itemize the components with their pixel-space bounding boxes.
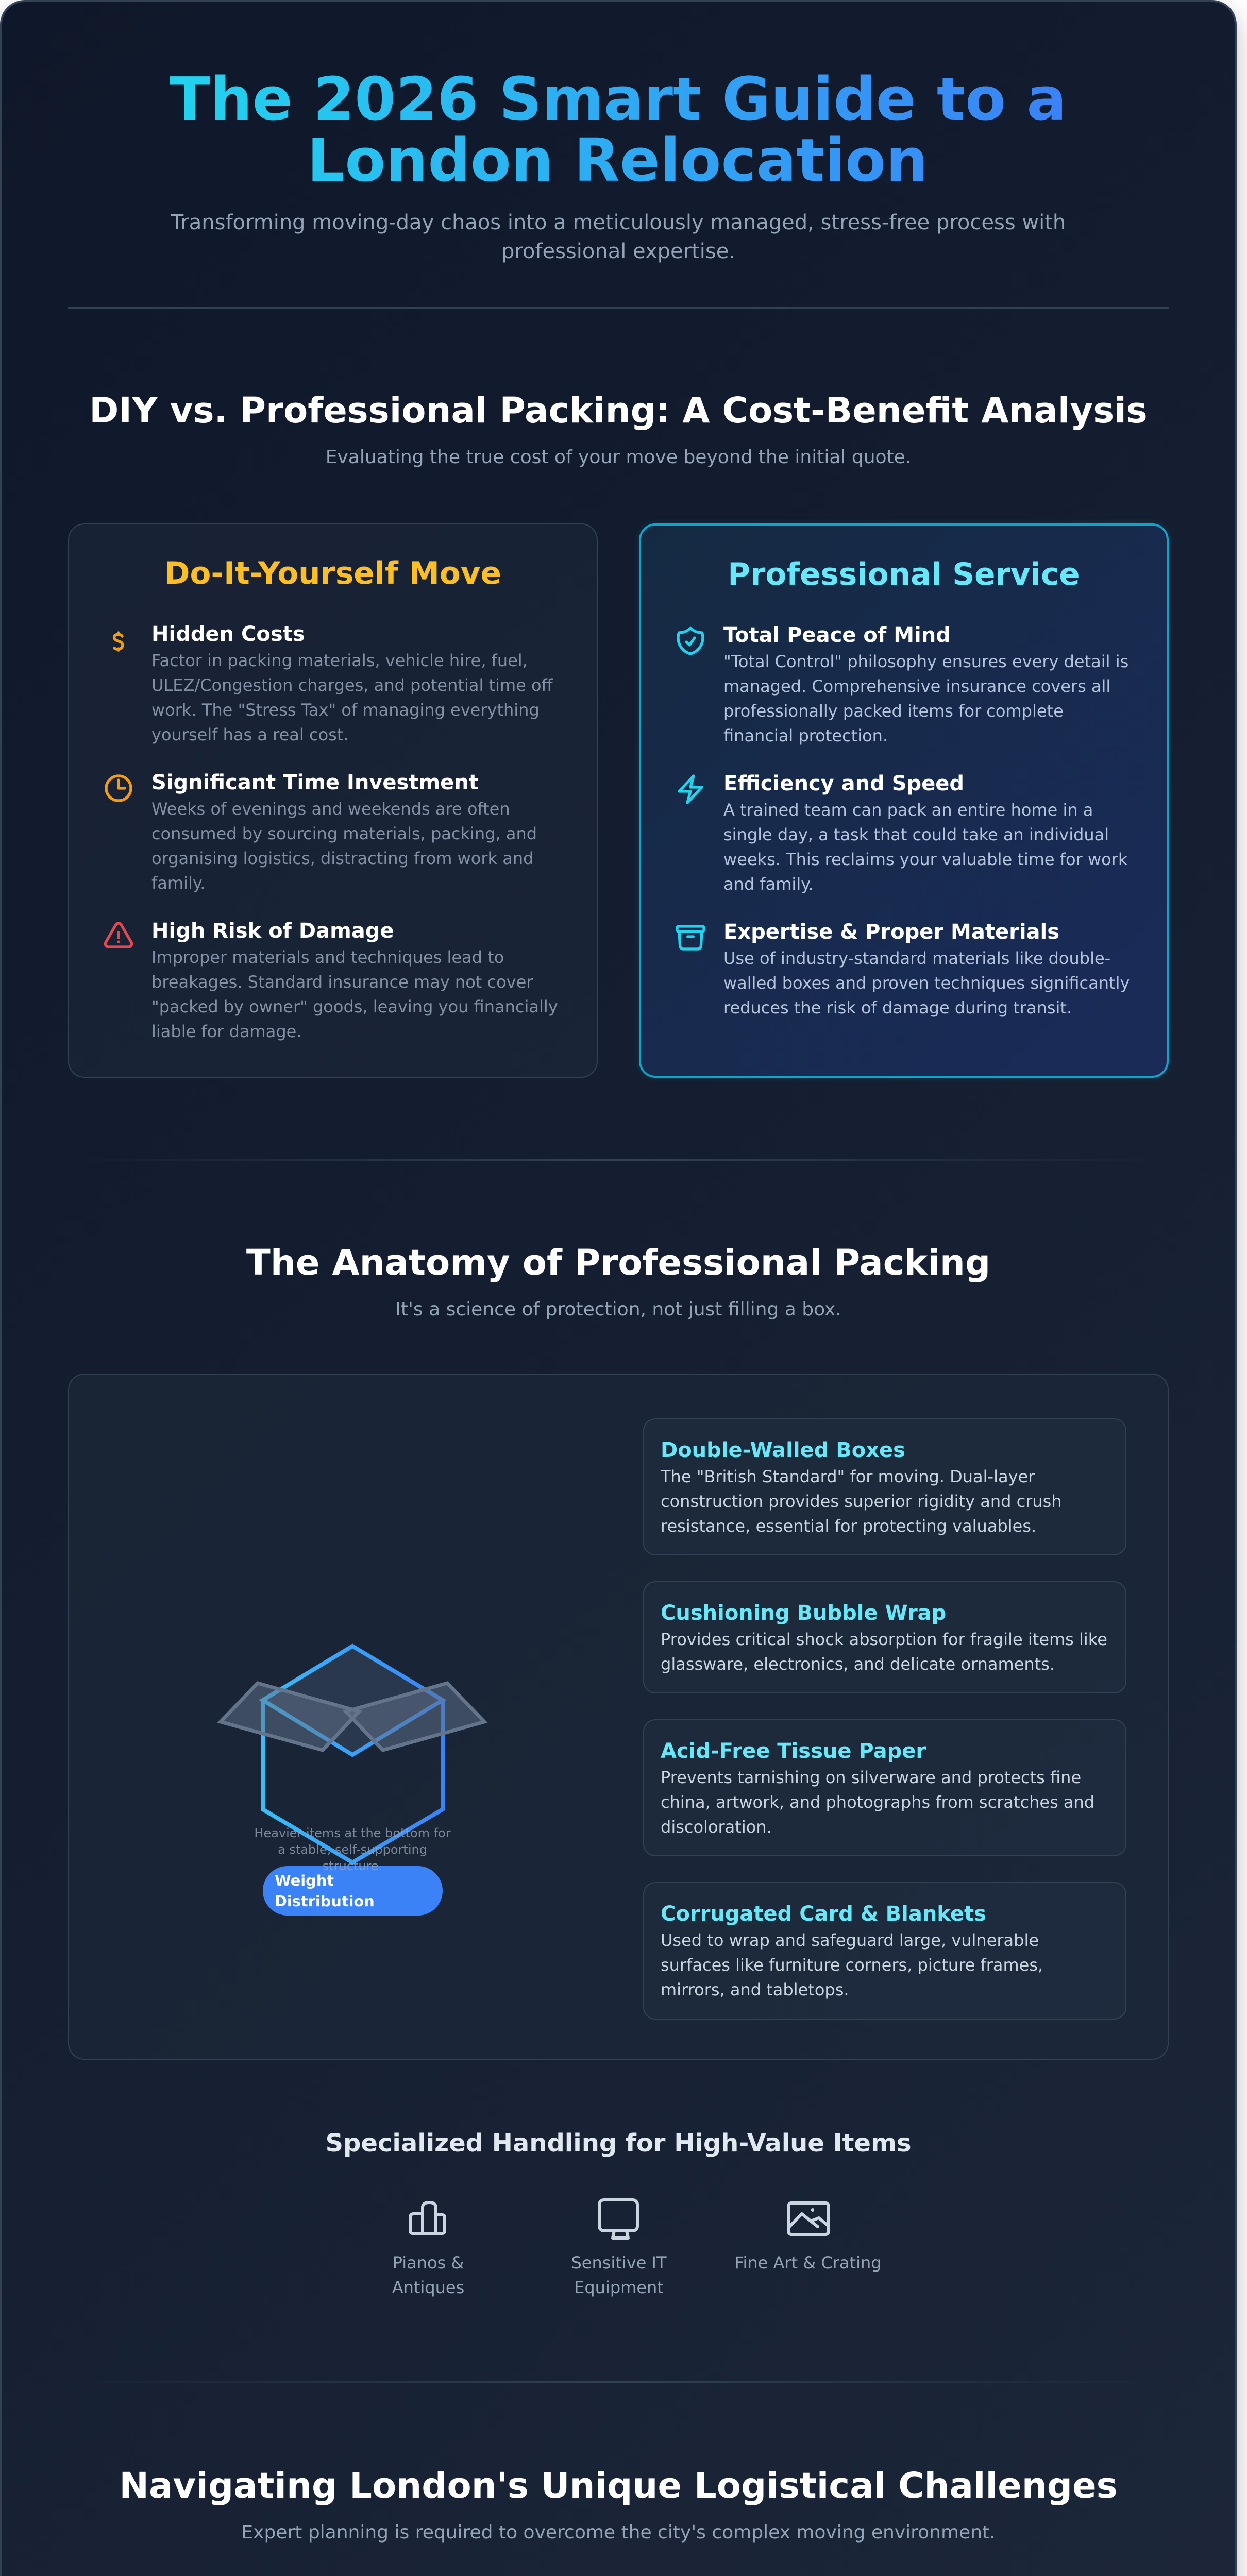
label: pianos <box>325 2250 531 2300</box>
title: The 2026 Smart Guide to a <box>170 65 1067 134</box>
box caption: Heavier items at the bottom for <box>254 1826 451 1840</box>
item text: professionally packed items for complete <box>723 701 1064 721</box>
item text <box>723 946 1130 1020</box>
icon: archive box <box>674 921 707 954</box>
label: sensitive IT: Sensitive IT <box>571 2253 667 2273</box>
section heading: DIY vs. Professional Packing: A Cost-Benefit Analysis <box>89 390 1148 431</box>
item text: organising logistics, distracting from work and <box>151 849 533 868</box>
card text: surfaces like furniture corners, picture frames, <box>661 1955 1043 1975</box>
item: time investment <box>102 772 566 895</box>
panel title: Professional Service <box>728 557 1080 592</box>
item text: and family. <box>723 874 814 894</box>
item text <box>151 648 553 747</box>
panel: anatomy <box>68 1374 1169 2060</box>
card text: mirrors, and tabletops. <box>661 1980 849 1999</box>
box diagram <box>206 1623 515 1932</box>
pill label: Weight <box>275 1872 334 1889</box>
item heading: Expertise & Proper Materials <box>723 920 1059 944</box>
item text: Improper materials and techniques lead to <box>151 947 504 967</box>
item text: managed. Comprehensive insurance covers all <box>723 676 1110 696</box>
card: bubble wrap <box>643 1581 1126 1693</box>
icon: clock <box>102 772 135 805</box>
item text: breakages. Standard insurance may not cover <box>151 972 533 992</box>
item heading: Total Peace of Mind <box>723 623 951 647</box>
item text: Factor in packing materials, vehicle hire, fuel, <box>151 651 528 670</box>
card text <box>661 1765 1094 1839</box>
card text <box>661 1627 1107 1676</box>
box caption <box>249 1825 456 1874</box>
section heading: The Anatomy of Professional Packing <box>246 1242 990 1283</box>
card text: The "British Standard" for moving. Dual-layer <box>661 1467 1035 1486</box>
panel title: Do-It-Yourself Move <box>164 556 501 591</box>
item text: "Total Control" philosophy ensures every detail is <box>723 652 1128 671</box>
subtitle <box>171 211 1066 263</box>
label: sensitive IT <box>516 2250 722 2300</box>
subtitle: professional expertise. <box>501 240 735 263</box>
icon: monitor <box>593 2195 644 2241</box>
card heading: Acid-Free Tissue Paper <box>661 1739 926 1763</box>
card text: Provides critical shock absorption for fragile items like <box>661 1630 1107 1649</box>
label: pianos: Antiques <box>392 2278 464 2297</box>
item text: liable for damage. <box>151 1022 302 1041</box>
box caption: a stable, self-supporting <box>278 1842 427 1857</box>
section subheading: Expert planning is required to overcome the city's complex moving environment. <box>241 2522 996 2543</box>
card heading: Double-Walled Boxes <box>661 1438 905 1462</box>
card text: construction provides superior rigidity and crush <box>661 1492 1062 1511</box>
item text: financial protection. <box>723 726 888 745</box>
item text: walled boxes and proven techniques significantly <box>723 973 1130 993</box>
label: fine art: Fine Art & Crating <box>734 2253 882 2273</box>
label: pianos: Pianos & <box>393 2253 464 2273</box>
icon: piano <box>402 2195 453 2236</box>
pill label <box>275 1870 375 1911</box>
card: corrugated card <box>643 1882 1126 2020</box>
card text: glassware, electronics, and delicate ornaments. <box>661 1654 1055 1674</box>
item text: Use of industry-standard materials like double- <box>723 948 1110 968</box>
item heading: Efficiency and Speed <box>723 772 964 795</box>
item text: A trained team can pack an entire home in a <box>723 800 1093 820</box>
header <box>68 65 1169 309</box>
item text: "packed by owner" goods, leaving you financially <box>151 997 558 1016</box>
card text: china, artwork, and photographs from scratches and <box>661 1792 1094 1812</box>
specialized handling heading: Specialized Handling for High-Value Items <box>325 2129 912 2158</box>
icon: bolt <box>674 773 707 806</box>
item heading: Hidden Costs <box>151 622 305 646</box>
icon: shield <box>674 624 707 657</box>
item text <box>151 945 558 1044</box>
item text: family. <box>151 873 205 893</box>
icon: dollar <box>102 623 135 656</box>
item text: consumed by sourcing materials, packing, and <box>151 824 537 843</box>
card text: discoloration. <box>661 1817 772 1837</box>
card text: resistance, essential for protecting valuables. <box>661 1516 1036 1536</box>
item text: single day, a task that could take an individual <box>723 825 1109 844</box>
card heading: Corrugated Card & Blankets <box>661 1902 986 1926</box>
item: expertise <box>674 921 1138 1045</box>
card: double-walled boxes <box>643 1418 1126 1555</box>
section: DIY vs professional <box>0 371 1237 1092</box>
subtitle: Transforming moving-day chaos into a meticulously managed, stress-free process with <box>171 211 1066 234</box>
item text <box>723 649 1128 748</box>
item: peace of mind <box>674 624 1138 748</box>
icon: open box <box>206 1623 515 1880</box>
item text <box>151 796 537 895</box>
pill label: Distribution <box>275 1892 375 1910</box>
panel: do-it-yourself <box>68 523 598 1078</box>
item text <box>723 798 1127 896</box>
card heading: Cushioning Bubble Wrap <box>661 1601 946 1625</box>
panel: professional service <box>639 523 1169 1078</box>
item heading: High Risk of Damage <box>151 919 394 943</box>
title <box>170 69 1066 192</box>
item text: reduces the risk of damage during transit. <box>723 998 1072 1018</box>
card: tissue paper <box>643 1719 1126 1856</box>
section heading: Navigating London's Unique Logistical Challenges <box>119 2465 1118 2506</box>
label: sensitive IT: Equipment <box>574 2278 664 2297</box>
item: hidden costs <box>102 623 566 747</box>
section: anatomy of packing <box>0 1226 1237 2308</box>
item text: ULEZ/Congestion charges, and potential time off <box>151 675 553 695</box>
card text <box>661 1928 1043 2002</box>
item text: yourself has a real cost. <box>151 725 349 744</box>
icon: fine art <box>781 2195 837 2236</box>
pill: weight distribution <box>263 1866 443 1916</box>
item: efficiency <box>674 773 1138 896</box>
item text: Weeks of evenings and weekends are often <box>151 799 510 819</box>
section subheading: It's a science of protection, not just filling a box. <box>395 1299 841 1320</box>
header divider <box>68 307 1169 309</box>
box caption: structure. <box>323 1859 382 1873</box>
item: risk of damage <box>102 920 566 1044</box>
section subheading: Evaluating the true cost of your move beyond the initial quote. <box>326 447 911 468</box>
section: london logistics <box>0 2452 1237 2576</box>
item text: work. The "Stress Tax" of managing everything <box>151 700 540 720</box>
card text <box>661 1464 1062 1538</box>
icon: warning triangle <box>102 920 135 953</box>
card text: Used to wrap and safeguard large, vulnerable <box>661 1930 1039 1950</box>
card text: Prevents tarnishing on silverware and protects fine <box>661 1768 1081 1787</box>
item text: weeks. This reclaims your valuable time for work <box>723 850 1127 869</box>
title: London Relocation <box>307 126 928 195</box>
item heading: Significant Time Investment <box>151 771 479 794</box>
